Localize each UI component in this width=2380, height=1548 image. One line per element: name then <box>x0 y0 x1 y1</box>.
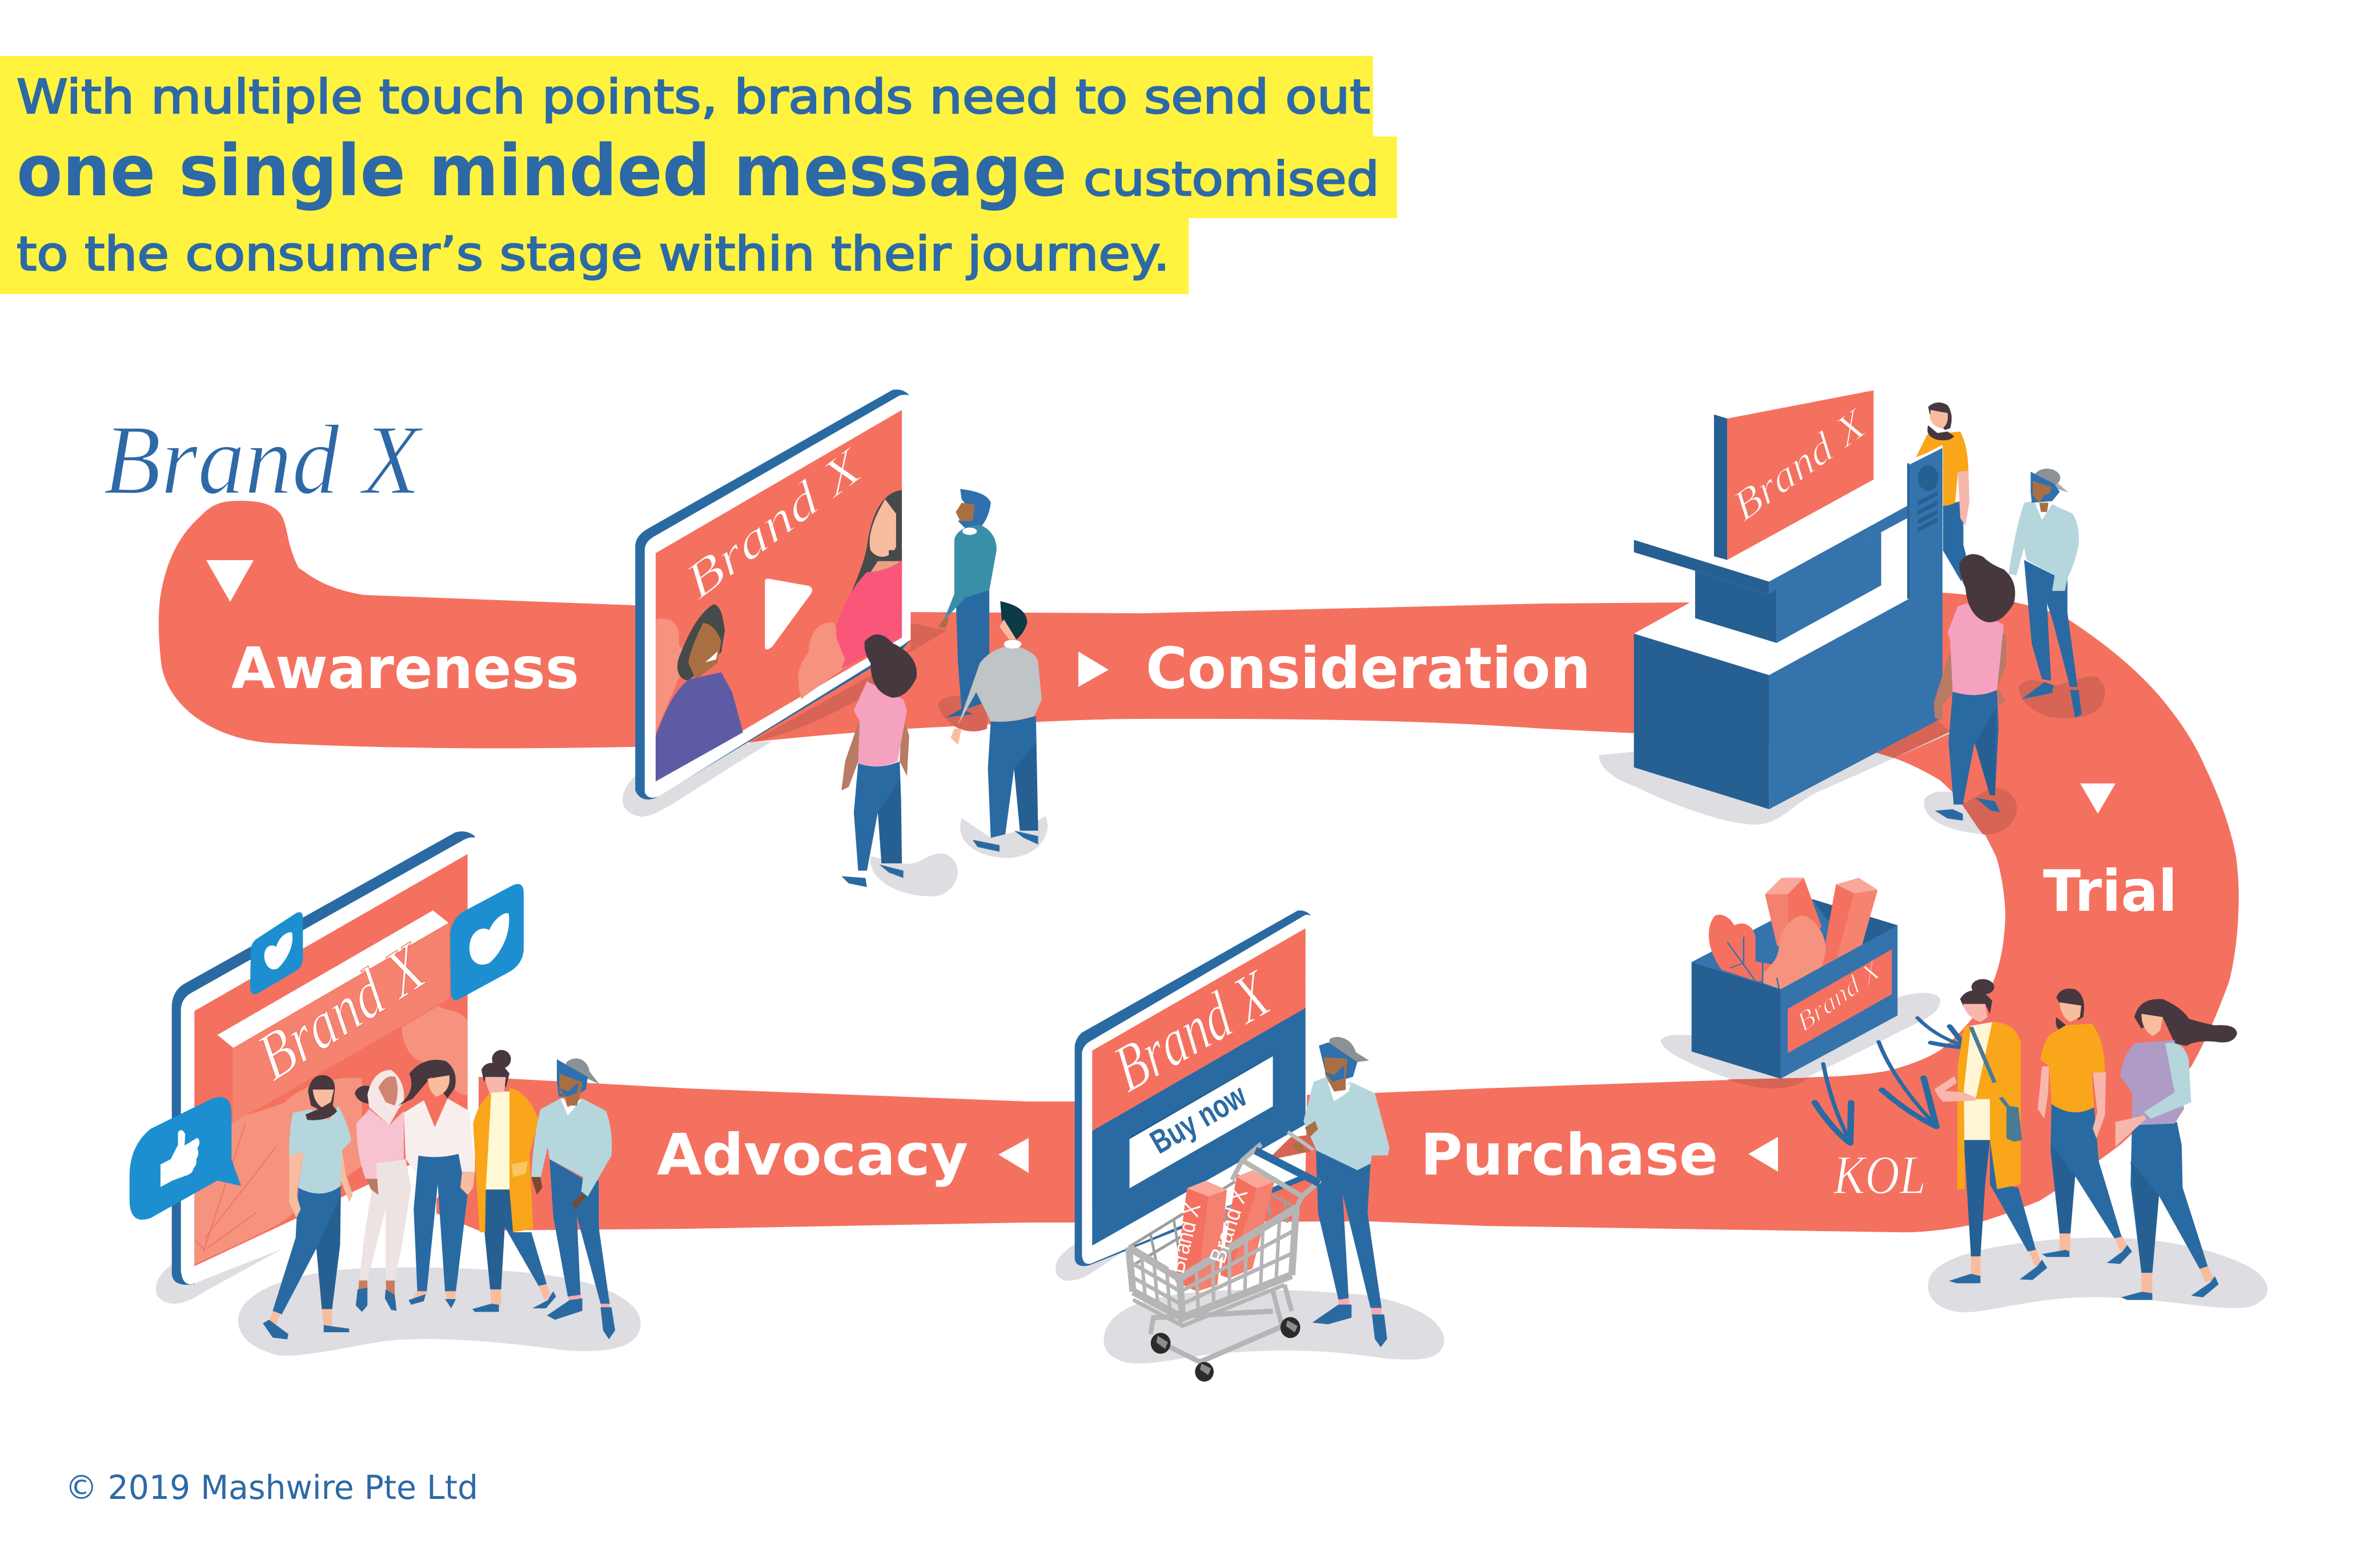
screen signature: Brand X <box>1103 954 1281 1107</box>
monitor frame <box>635 389 909 799</box>
KOL label: KOL <box>1832 1144 1926 1205</box>
title: highlighted headline: one single minded message <box>17 130 1067 212</box>
sign signature: Brand X <box>1726 399 1874 530</box>
panel: advocacy screen, social icons and group <box>130 831 641 1356</box>
screen leaves <box>656 618 688 732</box>
floor shadows <box>1055 1244 1130 1281</box>
journey ribbon <box>159 501 2239 1232</box>
arrow: advocacy <box>998 1138 1029 1173</box>
person: man with cap and phone <box>1287 1037 1390 1347</box>
brand name signature: Brand X <box>103 404 424 515</box>
screen person: woman in purple <box>677 604 725 681</box>
arrow: purchase <box>1748 1137 1778 1172</box>
icon: thumbs up bubble <box>130 1097 241 1220</box>
cart wheels <box>1151 1317 1301 1382</box>
arrow: awareness <box>206 560 254 602</box>
panel: trial product box, KOL and shoppers <box>1661 878 2267 1312</box>
person: woman in pink top <box>841 634 917 887</box>
booth side panel <box>1907 445 1942 598</box>
influence arrows <box>1815 1018 1966 1143</box>
label: advocacy: Advocacy <box>657 1121 968 1188</box>
box products <box>1765 878 1804 894</box>
person: man in teal <box>938 489 997 718</box>
monitor screen <box>656 410 902 782</box>
booth sign <box>1714 391 1873 560</box>
monitor <box>172 831 475 1285</box>
title: highlighted headline: customised <box>1083 152 1379 207</box>
floor shadows <box>156 1188 369 1304</box>
person: woman in lilac with flowing hair <box>2116 999 2237 1300</box>
screen leaves <box>402 1006 468 1095</box>
label: awareness: Awareness <box>231 635 579 702</box>
person: woman in amber cardigan <box>1934 979 2047 1283</box>
product labels: Brand X <box>1164 1200 1206 1276</box>
monitor <box>1075 910 1315 1266</box>
screen signature: Brand X <box>246 927 437 1095</box>
shadows <box>1661 993 1940 1088</box>
booth shadow <box>1599 718 1950 825</box>
cart products <box>1175 1170 1274 1292</box>
product labels: Brand X <box>1205 1185 1253 1266</box>
person: woman in hijab <box>355 1070 411 1312</box>
arrow: consideration <box>1078 652 1109 687</box>
buy now button label: Buy now <box>1144 1077 1253 1161</box>
person: woman in pale teal tee <box>263 1075 353 1340</box>
cart back grid <box>1129 1173 1296 1269</box>
person: woman in pink with long hair <box>1934 554 2015 821</box>
product labels <box>1164 1185 1253 1276</box>
screen signature: Brand X <box>677 437 872 610</box>
floor shadows <box>623 741 772 817</box>
stage marker arrows and labels <box>206 560 2177 1188</box>
label: trial: Trial <box>2043 858 2177 924</box>
panel: consideration booth and visitors <box>1599 391 2105 835</box>
title: highlighted headline: With multiple touch points, brands need to send out <box>17 70 1370 124</box>
icon: heart badge large <box>450 884 524 1000</box>
arrow: trial <box>2080 783 2116 814</box>
person: woman in amber behind panel <box>1916 403 1969 582</box>
icon: heart badge small <box>250 912 303 994</box>
label: consideration: Consideration <box>1146 635 1591 702</box>
panel: purchase screen, shopper and cart <box>1055 910 1444 1382</box>
person: woman in white blouse <box>398 1060 475 1308</box>
product box <box>1692 878 1897 1079</box>
panel: awareness video screen and viewers <box>623 389 1047 896</box>
person: woman in amber cardigan <box>472 1050 556 1312</box>
booth body <box>1634 445 1942 809</box>
play button <box>765 579 812 649</box>
person: woman in amber top <box>2038 988 2132 1264</box>
title: highlighted headline: to the consumer’s stage within their journey. <box>17 227 1170 282</box>
box signature: Brand X <box>1792 954 1885 1038</box>
person: man in pale blue with cap <box>531 1058 615 1340</box>
copyright: © 2019 Mashwire Pte Ltd <box>65 1468 478 1507</box>
label: purchase: Purchase <box>1420 1121 1718 1188</box>
person: man in pale blue with cap <box>2009 469 2105 718</box>
title: highlighted headline <box>0 56 1397 294</box>
screen person: woman in pink <box>836 490 902 638</box>
cart front <box>1129 1144 1321 1362</box>
person: man in grey sweater <box>951 601 1042 852</box>
